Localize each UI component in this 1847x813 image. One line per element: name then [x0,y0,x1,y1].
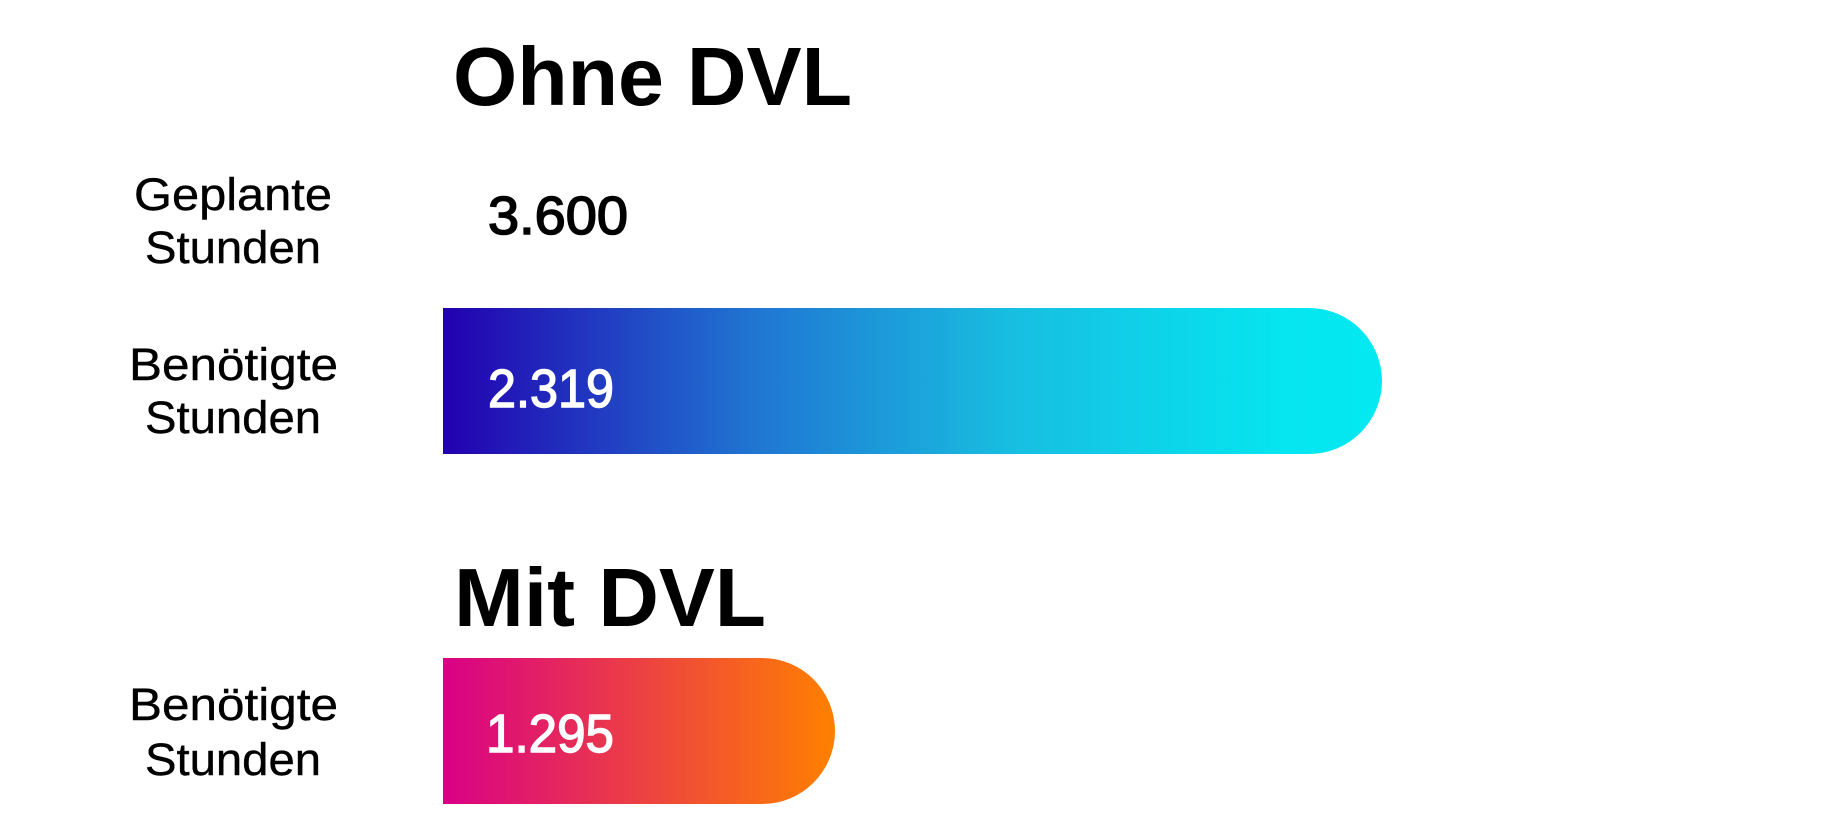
heading: Mit DVL: Mit DVL [454,551,766,644]
label: Geplante Stunden: Stunden [145,222,321,273]
label: Benötigte Stunden (ohne DVL) [129,339,338,443]
bar: 2.319 hours without DVL [443,308,1382,454]
label: Benötigte Stunden (ohne DVL): Stunden [145,392,321,443]
value: 3.600 planned hours: 3.600 [488,186,628,246]
label: Benötigte Stunden (mit DVL) [129,679,338,785]
label: Benötigte Stunden (ohne DVL): Benötigte [129,339,338,390]
value: 1.295: 1.295 [486,704,614,764]
label: Benötigte Stunden (mit DVL): Benötigte [129,679,338,730]
value: 2.319: 2.319 [488,359,614,419]
label: Geplante Stunden: Geplante [134,169,332,220]
bar: 1.295 hours with DVL [443,658,835,804]
label: Geplante Stunden [134,169,332,273]
heading: Ohne DVL: Ohne DVL [453,30,852,123]
label: Benötigte Stunden (mit DVL): Stunden [145,734,321,785]
